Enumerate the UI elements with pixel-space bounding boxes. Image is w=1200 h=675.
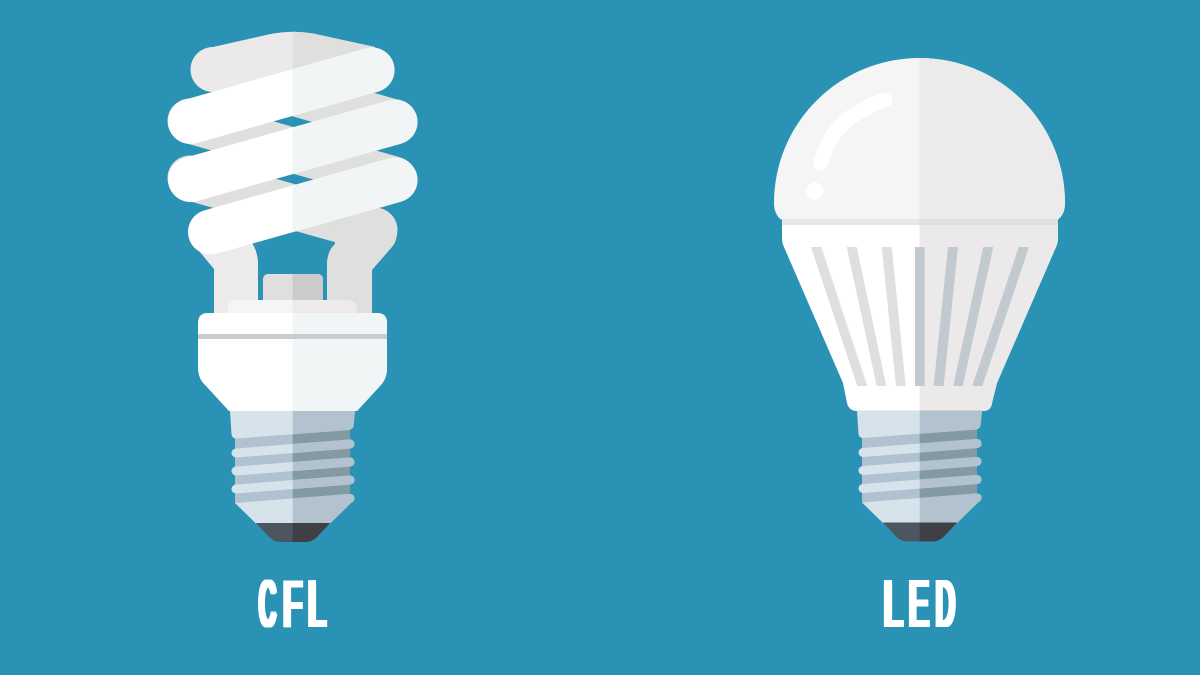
CFL left leg [190,225,258,316]
icon: LED bulb [774,58,1065,541]
LED heat-sink body [782,219,1058,411]
LED dome [774,58,1065,219]
label: CFL [257,567,324,641]
CFL centre stub [263,274,323,300]
LED dome highlight arc [821,100,885,163]
CFL screw base [230,411,355,542]
LED dome highlight dot [806,182,824,200]
CFL base housing [198,313,387,411]
icon: CFL bulb [190,32,397,542]
label: CFL: F [281,567,300,640]
LED screw base [857,410,982,542]
CFL back coil [190,32,394,230]
label: LED: E [907,567,927,640]
CFL right leg [293,208,397,316]
label: LED: D [934,568,953,640]
CFL collar [228,300,357,313]
label: LED [882,567,953,641]
label: CFL: C [257,569,274,641]
label: LED: L [882,568,901,641]
CFL front coil [190,70,395,232]
LED fins [811,247,1029,386]
label: CFL: L [306,568,324,640]
